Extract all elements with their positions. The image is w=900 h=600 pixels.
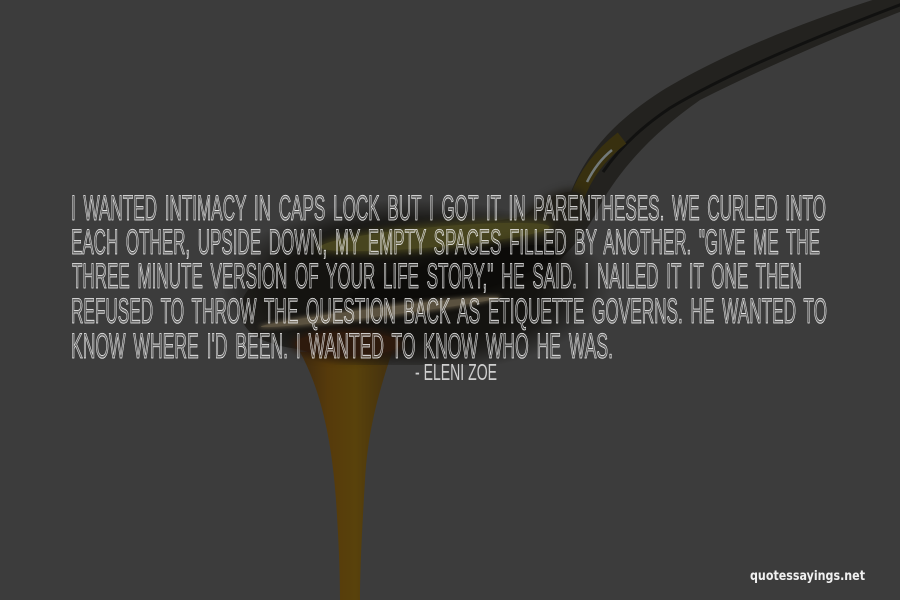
bowl olive highlight [320, 217, 550, 257]
attribution: - ELENI ZOE [415, 359, 497, 385]
bowl lower red-brown [295, 332, 400, 356]
spoon bowl [220, 190, 610, 365]
watermark: quotessayings.net [750, 568, 865, 584]
honey drip [300, 352, 392, 600]
bowl light reflection [260, 293, 500, 331]
bowl dark centre [339, 232, 561, 326]
quote text [71, 189, 827, 366]
bowl neck [484, 179, 596, 285]
spoon handle and bowl silhouette [240, 0, 900, 351]
